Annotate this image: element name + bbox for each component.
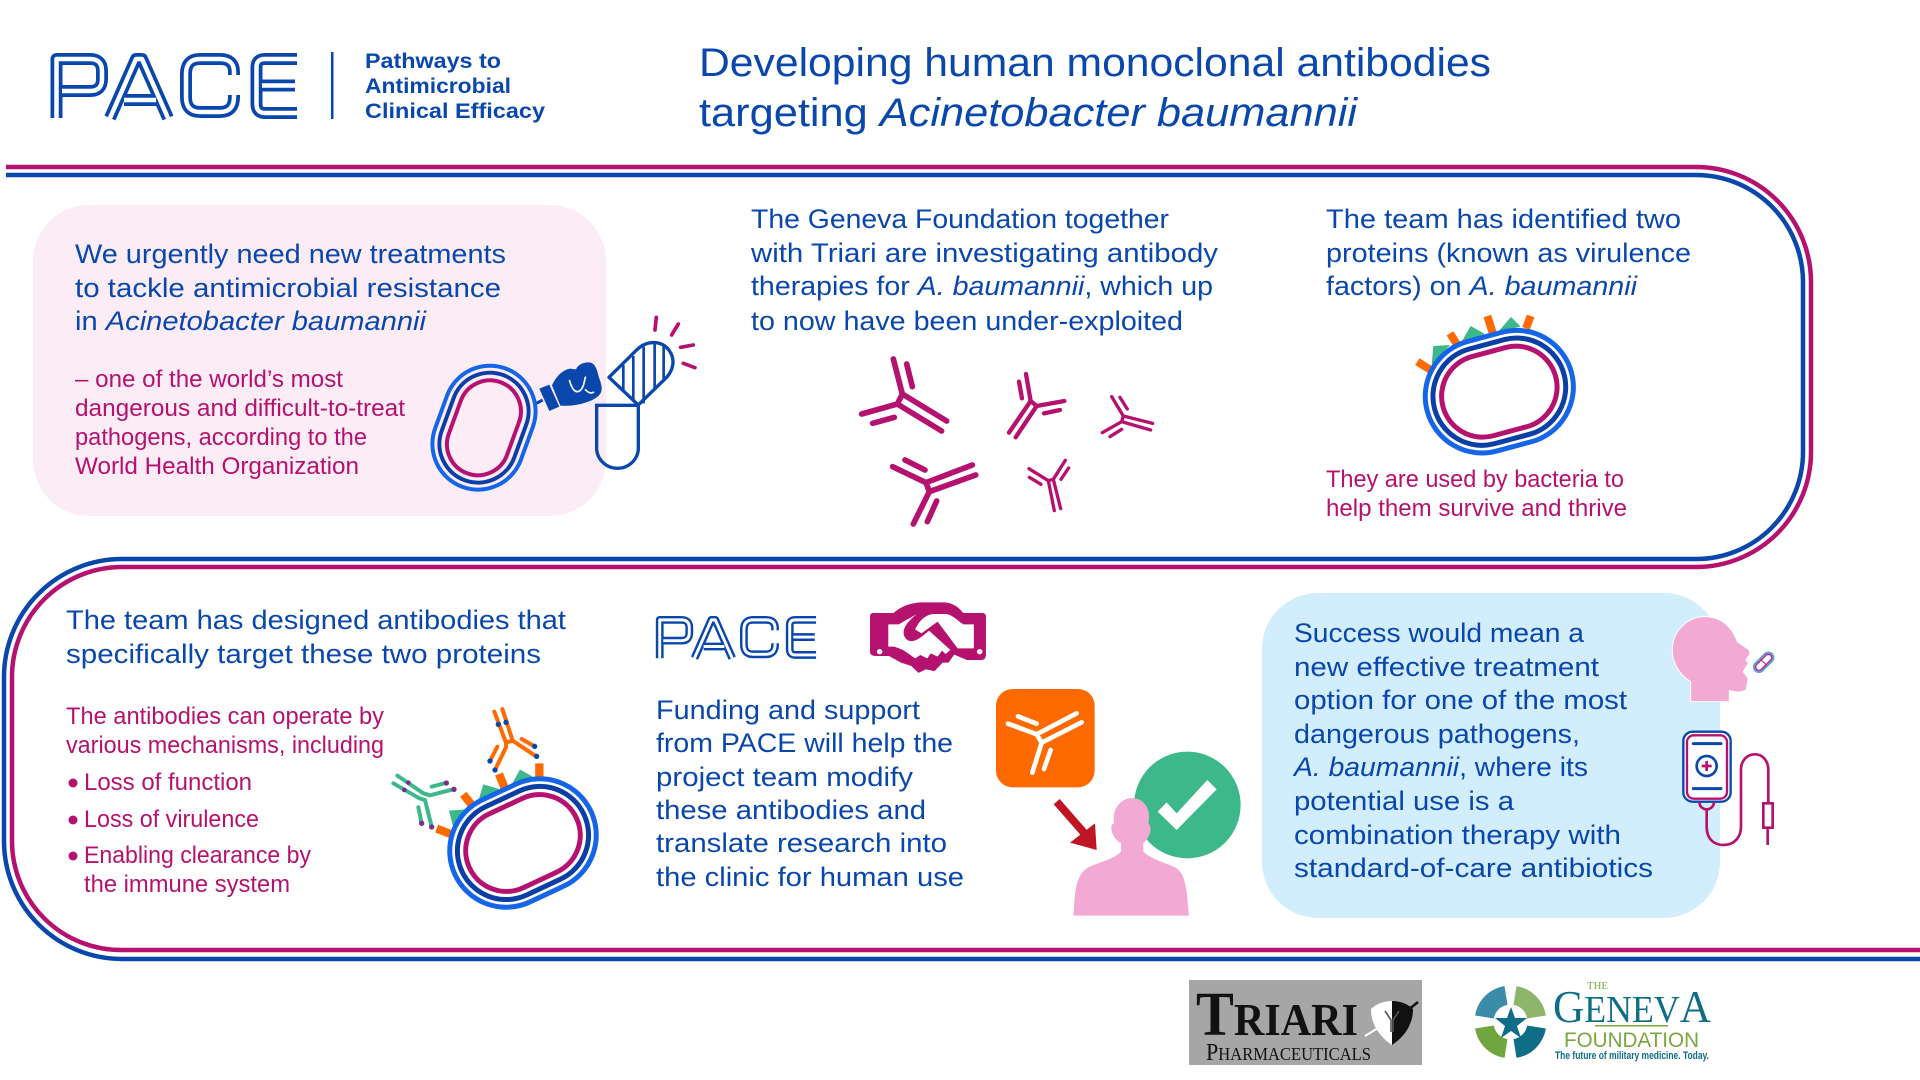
logo tagline: Pathways to [365, 50, 501, 73]
text: mechanisms list: Loss of virulence [84, 806, 259, 833]
text: Geneva Foundation and Triari: therapies for A. baumannii , which up [751, 271, 1213, 301]
text: virulence factors: The team has identified two [1326, 204, 1681, 234]
logo tagline: Antimicrobial [365, 75, 511, 98]
text: funding and support: translate research into [656, 828, 947, 858]
icon: handshake [871, 603, 985, 672]
logo tagline: Clinical Efficacy [365, 100, 545, 123]
text: success: potential use is a [1294, 786, 1515, 816]
text: used by bacteria [1326, 466, 1627, 522]
text: funding and support: project team modify [656, 762, 914, 792]
text: funding and support: Funding and support [656, 695, 921, 725]
text: Geneva Foundation and Triari: with Triari are investigating antibody [750, 238, 1219, 268]
text: success: new effective treatment [1294, 652, 1600, 682]
icon: antibody to patient with checkmark [996, 689, 1241, 916]
magenta flow line [6, 167, 1920, 950]
text: mechanisms list: the immune system [84, 871, 290, 898]
icon: magenta antibodies [862, 359, 1153, 524]
text: urgent need: in Acinetobacter baumannii [75, 306, 427, 336]
text: success: A. baumannii , where its [1292, 752, 1588, 782]
text: funding and support: the clinic for human use [656, 862, 964, 892]
text: success: option for one of the most [1294, 685, 1628, 715]
icon: bacterium with virulence factors [1413, 316, 1586, 466]
text: designed antibodies [66, 605, 567, 669]
text: mechanisms list [66, 703, 384, 898]
title: Developing human monoclonal antibodies [699, 41, 1491, 85]
title [699, 41, 1491, 135]
logo: PACE [56, 59, 297, 118]
text: designed antibodies: The team has designed antibodies that [66, 605, 567, 635]
text: funding and support [656, 695, 964, 892]
text: Geneva Foundation and Triari: to now have been under-exploited [751, 306, 1183, 336]
text: Geneva Foundation and Triari: The Geneva Foundation together [751, 204, 1169, 234]
logo: Triari Pharmaceuticals: TRIARI [1196, 981, 1358, 1049]
text: dangerous pathogens: dangerous and difficult-to-treat [75, 395, 405, 422]
text: mechanisms list: The antibodies can operate by [66, 703, 384, 730]
logo: The Geneva Foundation: FOUNDATION [1564, 1029, 1699, 1052]
icon: head with pill and IV bag [1672, 617, 1775, 845]
text: success [1292, 618, 1653, 883]
logo: Triari Pharmaceuticals [1189, 980, 1422, 1066]
text: funding and support: these antibodies and [656, 795, 926, 825]
logo: The Geneva Foundation: The future of military medicine. Today. [1555, 1050, 1709, 1062]
text: mechanisms list: various mechanisms, including [66, 732, 384, 759]
text: used by bacteria: help them survive and thrive [1326, 495, 1627, 522]
text: mechanisms list: Enabling clearance by [84, 842, 311, 869]
text: dangerous pathogens: – one of the world’s most [75, 366, 343, 393]
logo: The Geneva Foundation [1484, 981, 1711, 1062]
logo: PACE small [660, 620, 816, 658]
text: used by bacteria: They are used by bacteria to [1326, 466, 1624, 493]
text: urgent need: to tackle antimicrobial resistance [75, 273, 501, 303]
text: Geneva Foundation and Triari [750, 204, 1219, 336]
logo tagline [365, 50, 545, 123]
text: virulence factors [1326, 204, 1691, 301]
text: urgent need [75, 239, 506, 336]
text: dangerous pathogens: pathogens, according to the [75, 424, 367, 451]
text: urgent need: We urgently need new treatments [75, 239, 506, 269]
text: success: dangerous pathogens, [1294, 719, 1580, 749]
title: targeting Acinetobacter baumannii [699, 91, 1358, 135]
text: success: combination therapy with [1294, 820, 1621, 850]
text: success: Success would mean a [1294, 618, 1585, 648]
logo: The Geneva Foundation: THE [1587, 981, 1608, 992]
logo divider [331, 52, 334, 119]
text: success: standard-of-care antibiotics [1294, 853, 1653, 883]
panel: pink urgent need background [33, 205, 606, 516]
blue flow line [4, 175, 1920, 959]
icon: bacterium with glove and capsule [420, 317, 695, 502]
icon: bacterium bound by antibodies [393, 709, 615, 926]
text: virulence factors: proteins (known as virulence [1326, 238, 1691, 268]
text: funding and support: from PACE will help the [656, 728, 953, 758]
text: virulence factors: factors) on A. baumannii [1326, 271, 1638, 301]
text: dangerous pathogens [75, 366, 405, 480]
text: designed antibodies: specifically target these two proteins [66, 639, 541, 669]
logo: Triari Pharmaceuticals: PHARMACEUTICALS [1206, 1040, 1371, 1066]
logo: The Geneva Foundation: GENEVA [1553, 981, 1711, 1032]
text: mechanisms list: Loss of function [84, 769, 252, 796]
text: dangerous pathogens: World Health Organization [75, 453, 359, 480]
panel: light blue success background [1262, 593, 1720, 918]
